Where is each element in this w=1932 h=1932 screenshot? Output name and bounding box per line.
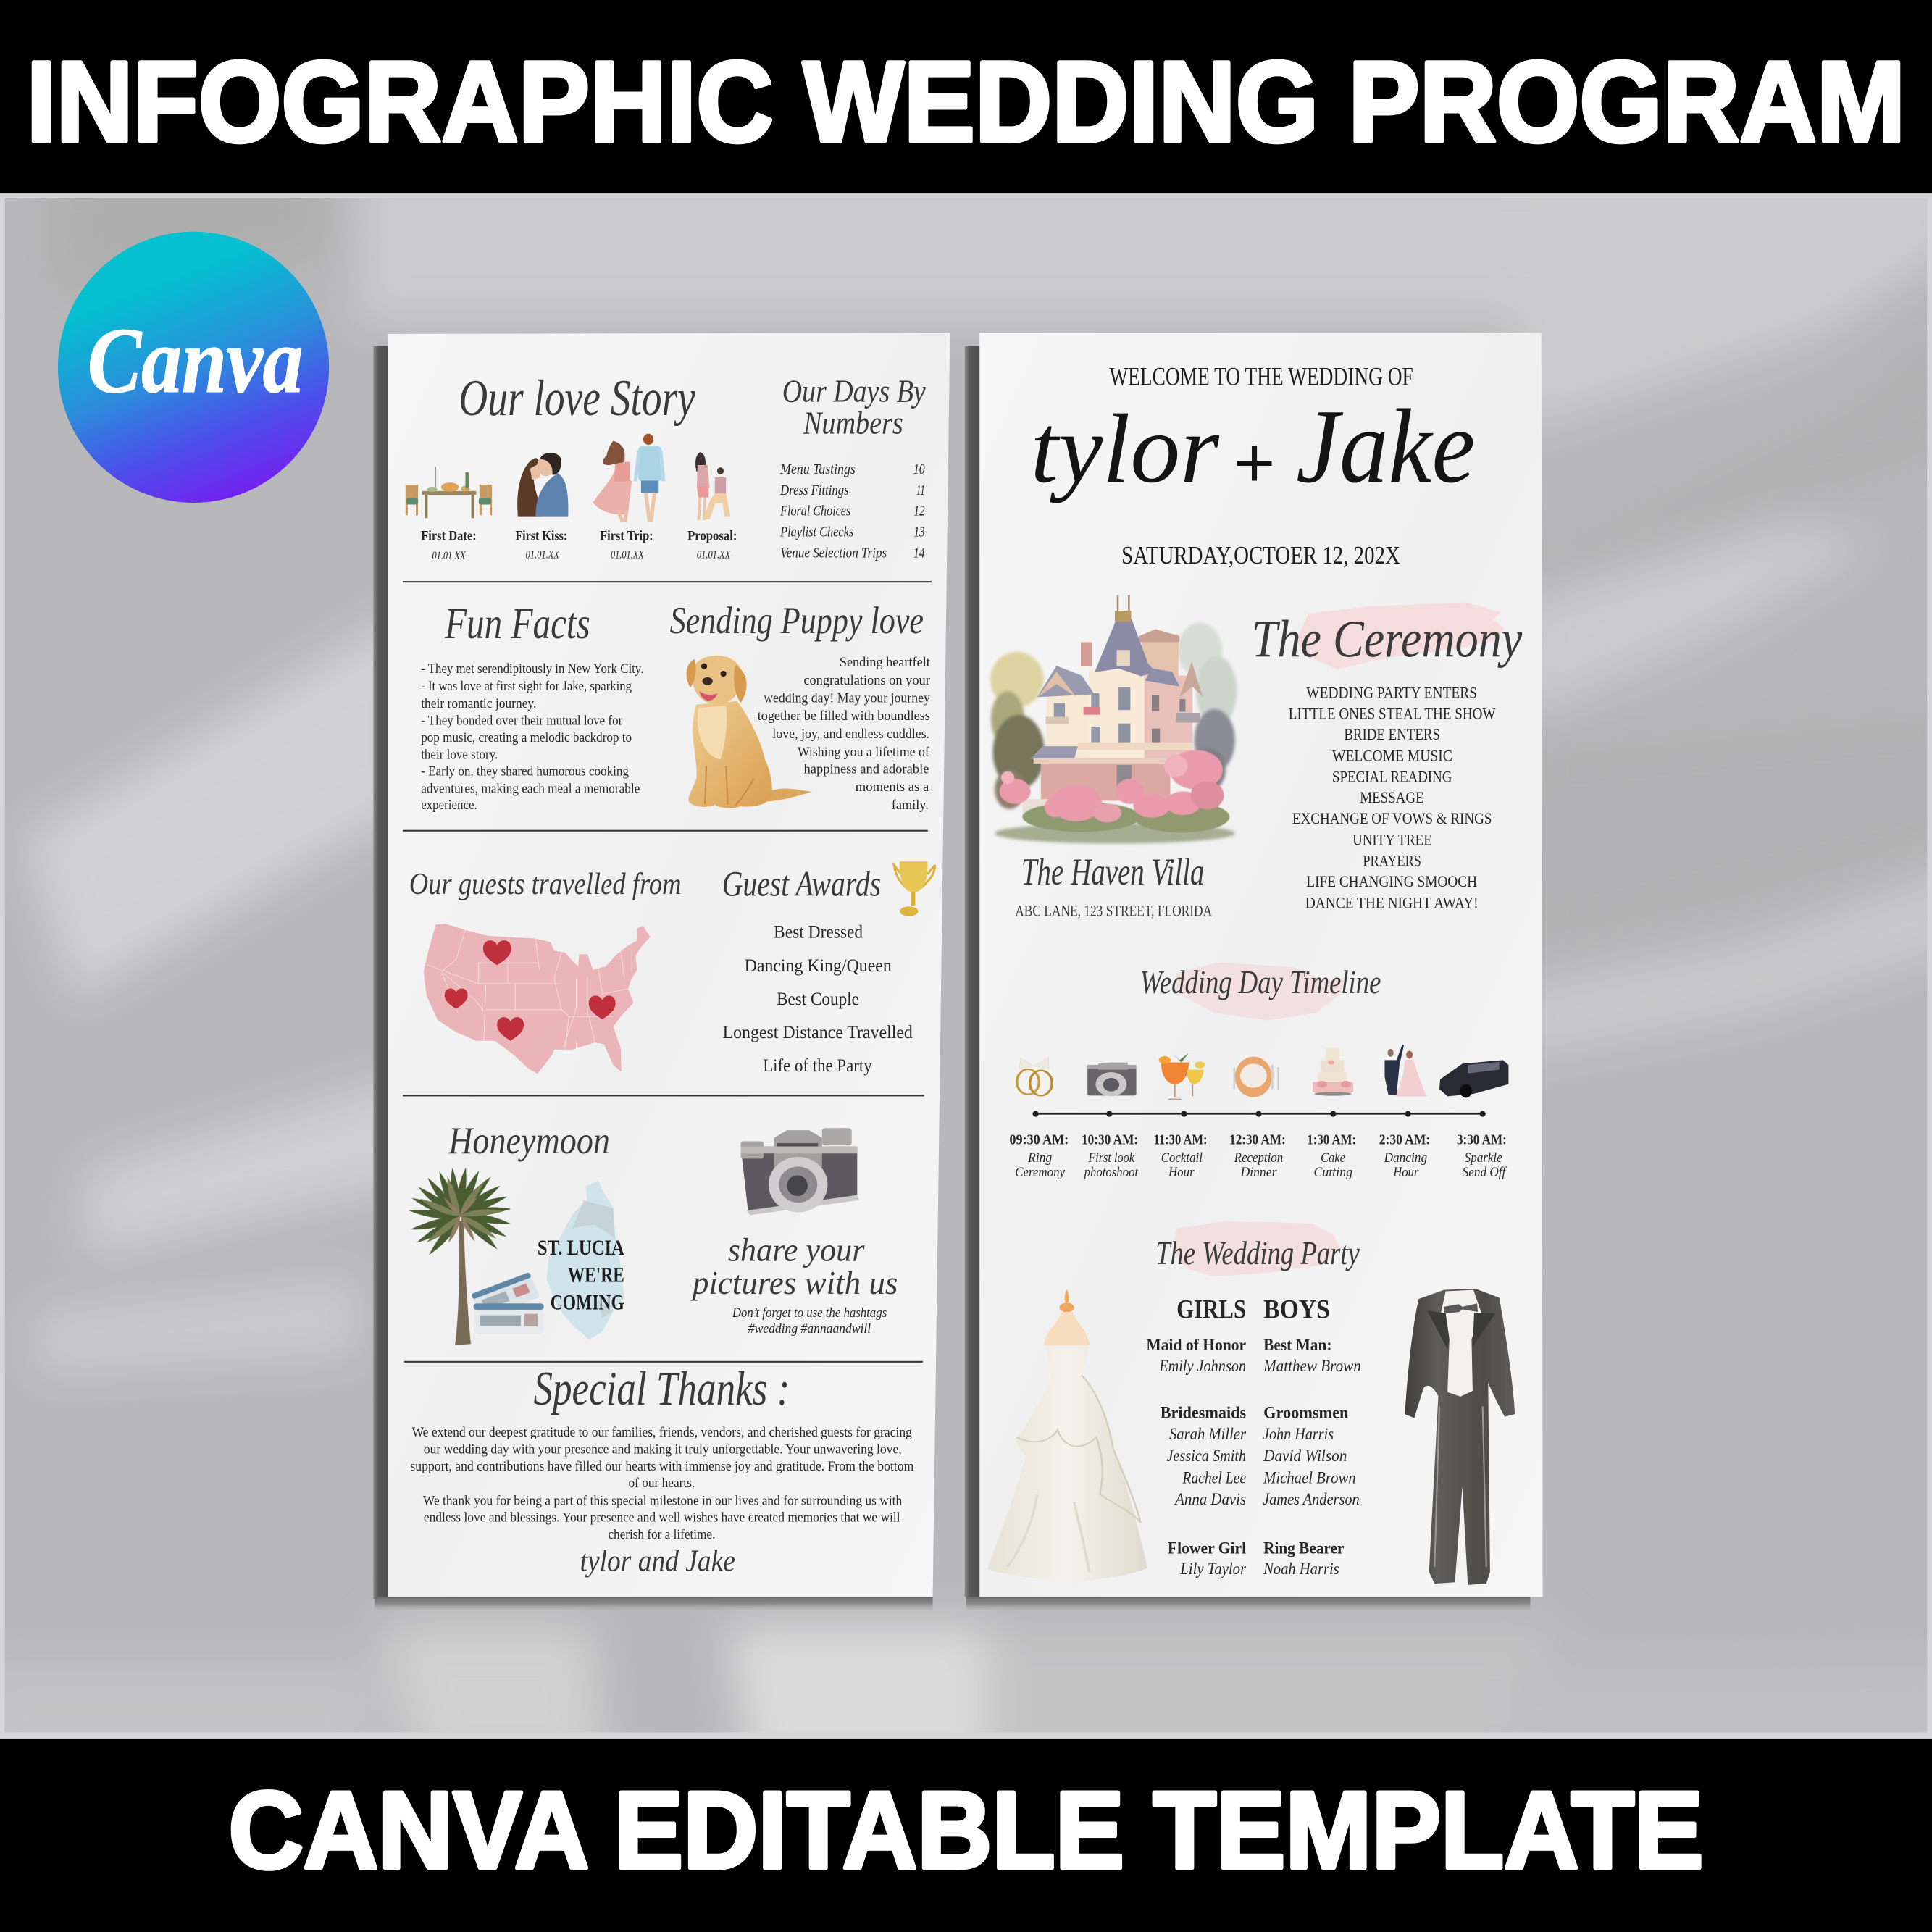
icon: place setting <box>1234 1057 1279 1097</box>
heading: the wedding party: The Wedding Party <box>1155 1234 1360 1271</box>
list: girls column: Lily Taylor <box>1179 1560 1246 1578</box>
timeline activity labels <box>1015 1150 1507 1180</box>
timeline activity labels: Cutting <box>1313 1165 1352 1180</box>
text block: fun facts list: their romantic journey. <box>421 696 536 711</box>
list: ceremony order: PRAYERS <box>1363 851 1421 869</box>
illustration: tuxedo <box>1405 1289 1515 1585</box>
list: day counts: 13 <box>913 524 925 540</box>
brush stroke <box>1173 1221 1341 1276</box>
list: boys column: James Anderson <box>1263 1490 1360 1508</box>
list: ceremony order: SPECIAL READING <box>1332 767 1452 785</box>
text block: puppy message <box>758 655 931 813</box>
text block: fun facts list: their love story. <box>421 747 498 762</box>
timeline times: 12:30 AM: <box>1229 1132 1286 1147</box>
list: boys column: Michael Brown <box>1263 1469 1356 1487</box>
list: ceremony order <box>1289 683 1496 911</box>
panel: left program page <box>388 333 950 1597</box>
list: award names <box>723 921 913 1076</box>
list: ceremony order: DANCE THE NIGHT AWAY! <box>1305 893 1479 911</box>
text block: fun facts list: - They met serendipitously in New York City. <box>421 661 643 677</box>
list: girls column: Sarah Miller <box>1169 1425 1246 1443</box>
heading: the haven villa: The Haven Villa <box>1021 851 1204 893</box>
list: ceremony order: LITTLE ONES STEAL THE SHOW <box>1289 705 1496 723</box>
icon: proposal <box>695 452 730 520</box>
timeline times: 11:30 AM: <box>1154 1132 1208 1147</box>
timeline activity labels: Cocktail <box>1161 1150 1203 1166</box>
heading: share your pictures with us: pictures with us <box>690 1264 898 1301</box>
timeline activity labels: Send Off <box>1463 1165 1507 1180</box>
text block: thanks message: our wedding day with your presence and making it truly unforgettable. Your unwavering love, <box>424 1442 902 1458</box>
icon: dinner table <box>406 467 492 518</box>
illustration: vintage camera <box>741 1128 859 1215</box>
text block: fun facts list: - Early on, they shared humorous cooking <box>421 764 629 779</box>
text block: thanks message: We thank you for being a part of this special milestone in our lives and for surrounding us with <box>423 1493 903 1508</box>
heading: guest awards: Guest Awards <box>722 864 881 904</box>
milestone labels: First Kiss: <box>515 529 567 544</box>
illustration: plane tickets <box>471 1272 544 1334</box>
list: ceremony order: EXCHANGE OF VOWS & RINGS <box>1292 809 1492 827</box>
list: award names: Dancing King/Queen <box>745 955 892 976</box>
list: girls column <box>1146 1295 1246 1578</box>
text block: puppy message: congratulations on your <box>803 673 931 688</box>
list: girls column: Flower Girl <box>1168 1539 1246 1557</box>
canva logo badge: Canva <box>88 309 303 412</box>
list: day counts: 11 <box>916 482 925 498</box>
timeline activity labels: First look <box>1087 1150 1134 1166</box>
timeline times: 09:30 AM: <box>1010 1132 1069 1147</box>
text: st lucia we're coming: WE'RE <box>568 1263 624 1287</box>
list: girls column: GIRLS <box>1176 1295 1246 1324</box>
list: ceremony order: MESSAGE <box>1360 788 1424 806</box>
signature: tylor and Jake <box>580 1544 735 1578</box>
text block: puppy message: Sending heartfelt <box>840 655 931 670</box>
list: ceremony order: BRIDE ENTERS <box>1344 725 1440 743</box>
title: couple names: Jake <box>1296 388 1475 505</box>
text block: puppy message: Wishing you a lifetime of <box>798 745 930 760</box>
icon: heart marker north <box>483 940 511 966</box>
text block: fun facts list <box>421 661 643 813</box>
section: venue <box>990 595 1237 919</box>
icon: kissing couple <box>517 453 568 517</box>
heading: honeymoon: Honeymoon <box>448 1120 610 1162</box>
timeline times: 2:30 AM: <box>1379 1132 1430 1147</box>
text block: thanks message: We extend our deepest gratitude to our families, friends, vendors, and cherished guests for gracing <box>412 1425 912 1440</box>
list: award names: Best Couple <box>777 988 859 1009</box>
icon: camera <box>1087 1063 1137 1096</box>
text block: thanks message <box>410 1425 914 1542</box>
list: boys column: David Wilson <box>1263 1447 1347 1465</box>
list: boys column <box>1263 1295 1361 1578</box>
icon: heart marker west <box>445 988 468 1009</box>
timeline times <box>1010 1132 1507 1147</box>
icons row <box>1017 1045 1508 1099</box>
section: wedding day timeline <box>1010 962 1508 1180</box>
list: ceremony order: WEDDING PARTY ENTERS <box>1306 683 1477 701</box>
text block: puppy message: happiness and adorable <box>803 761 929 777</box>
icon: wedding cake <box>1313 1048 1353 1096</box>
bottom banner <box>0 1739 1932 1932</box>
list: day counts <box>779 461 925 561</box>
text block: thanks message: support, and contributions have filled our hearts with immense joy and gratitude. From the bottom <box>410 1459 914 1474</box>
text: hashtags: #wedding #annaandwill <box>748 1321 871 1337</box>
text block: fun facts list: - It was love at first sight for Jake, sparking <box>421 679 632 694</box>
list: girls column: Emily Johnson <box>1158 1357 1246 1375</box>
timeline axis <box>1033 1111 1486 1117</box>
list: girls column: Anna Davis <box>1174 1490 1246 1508</box>
list: award names: Best Dressed <box>774 921 863 942</box>
text block: thanks message: cherish for a lifetime. <box>608 1527 715 1542</box>
section: share your pictures <box>690 1128 898 1337</box>
title: couple names: tylor <box>1031 395 1220 503</box>
milestone labels: 01.01.XX <box>432 550 466 562</box>
list: ceremony order: WELCOME MUSIC <box>1332 747 1452 765</box>
section: the wedding party <box>987 1221 1515 1585</box>
section: guests travelled from <box>409 867 682 1074</box>
list: boys column: Matthew Brown <box>1263 1357 1361 1375</box>
milestone labels: First Trip: <box>600 529 653 544</box>
timeline activity labels: Hour <box>1168 1165 1195 1180</box>
list: ceremony order: LIFE CHANGING SMOOCH <box>1306 872 1477 890</box>
list: girls column: Maid of Honor <box>1146 1336 1246 1354</box>
heading: special thanks: Special Thanks : <box>533 1363 790 1415</box>
timeline activity labels: Hour <box>1392 1165 1419 1180</box>
list: girls column: Jessica Smith <box>1166 1447 1246 1465</box>
text block: puppy message: family. <box>892 798 929 813</box>
paper shadows <box>373 346 1531 1610</box>
list: boys column: Groomsmen <box>1263 1404 1349 1422</box>
list: girls column: Rachel Lee <box>1182 1469 1246 1487</box>
milestone labels: First Date: <box>421 529 477 544</box>
text: hashtags <box>732 1305 887 1337</box>
illustration: wedding dress on mannequin <box>987 1289 1147 1584</box>
heading: our days by numbers: Our Days By <box>782 373 926 409</box>
illustration: victorian villa <box>990 595 1237 844</box>
section: guest awards <box>722 861 935 1076</box>
brush stroke <box>1176 962 1349 1020</box>
timeline times: 3:30 AM: <box>1457 1132 1507 1147</box>
canva logo badge <box>58 232 329 503</box>
map: united states with hearts <box>424 924 651 1074</box>
flowering bushes <box>1000 750 1229 832</box>
milestone labels: 01.01.XX <box>526 549 560 561</box>
icon: cocktails <box>1159 1053 1205 1099</box>
list: day counts: Playlist Checks <box>779 524 853 540</box>
icon: dancing couple <box>1384 1045 1426 1096</box>
text block: puppy message: love, joy, and endless cuddles. <box>772 727 929 742</box>
heading: our guests travelled from: Our guests travelled from <box>409 867 682 901</box>
list: boys column: Noah Harris <box>1263 1560 1339 1578</box>
text block: thanks message: of our hearts. <box>628 1476 695 1491</box>
text block: puppy message: moments as a <box>856 779 929 795</box>
icon: limousine <box>1439 1060 1508 1097</box>
text block: fun facts list: experience. <box>421 798 477 813</box>
timeline activity labels: Cake <box>1321 1150 1345 1166</box>
milestone labels: Proposal: <box>687 529 737 544</box>
section: welcome header <box>1031 361 1475 569</box>
text block: fun facts list: adventures, making each meal a memorable <box>421 781 640 796</box>
timeline activity labels: Dancing <box>1384 1150 1427 1166</box>
icon: gold trophy <box>894 861 935 916</box>
title: couple names: + <box>1234 422 1275 502</box>
milestone labels: 01.01.XX <box>697 549 731 561</box>
list: day counts: Menu Tastings <box>779 461 856 477</box>
timeline activity labels: Ceremony <box>1015 1165 1065 1180</box>
section: our days by numbers <box>779 373 926 561</box>
milestone labels: 01.01.XX <box>611 549 645 561</box>
title: couple names <box>1031 388 1475 505</box>
text block: thanks message: endless love and blessings. Your presence and well wishes have created memories that we will <box>424 1510 900 1526</box>
list: day counts: 10 <box>913 461 925 477</box>
text: venue address: ABC LANE, 123 STREET, FLORIDA <box>1015 901 1212 919</box>
text: st lucia we're coming <box>538 1236 624 1315</box>
icon: couple walking hand in hand <box>593 434 664 522</box>
text: hashtags: Don’t forget to use the hashtags <box>732 1305 887 1321</box>
text block: puppy message: together be filled with boundless <box>758 708 930 724</box>
heading: share your pictures with us <box>690 1231 898 1301</box>
icon: heart marker east <box>589 995 616 1019</box>
timeline activity labels: Ring <box>1027 1150 1053 1166</box>
section: honeymoon <box>408 1120 624 1345</box>
text block: puppy message: wedding day! May your journey <box>764 690 930 706</box>
list: award names: Longest Distance Travelled <box>723 1021 913 1042</box>
timeline activity labels: Dinner <box>1240 1165 1277 1180</box>
text block: fun facts list: pop music, creating a melodic backdrop to <box>421 730 632 745</box>
list: day counts: Dress Fittings <box>779 482 849 498</box>
list: ceremony order: UNITY TREE <box>1352 831 1432 849</box>
heading: fun facts: Fun Facts <box>444 599 590 648</box>
list: boys column: Best Man: <box>1263 1336 1331 1354</box>
text: st lucia we're coming: ST. LUCIA <box>538 1236 624 1260</box>
heading: wedding day timeline: Wedding Day Timeline <box>1140 963 1381 1000</box>
icon: heart marker south <box>497 1017 524 1041</box>
illustration: palm tree <box>408 1167 511 1345</box>
text block: fun facts list: - They bonded over their mutual love for <box>421 714 623 729</box>
timeline activity labels: Sparkle <box>1465 1150 1502 1166</box>
list: award names: Life of the Party <box>763 1055 872 1076</box>
bottom banner: CANVA EDITABLE TEMPLATE <box>229 1770 1703 1892</box>
list: day counts: Floral Choices <box>779 503 850 519</box>
heading: our days by numbers: Numbers <box>803 406 903 441</box>
heading: sending puppy love: Sending Puppy love <box>670 600 924 642</box>
heading: our days by numbers <box>782 373 926 441</box>
section: fun facts <box>421 599 643 813</box>
timeline activity labels: Reception <box>1234 1150 1283 1166</box>
illustration: golden retriever puppy <box>687 656 812 808</box>
section: the ceremony <box>1252 603 1523 911</box>
section: our love story <box>406 369 737 562</box>
top banner <box>0 0 1932 193</box>
list: day counts: 14 <box>913 545 925 561</box>
list: boys column: BOYS <box>1263 1295 1330 1324</box>
timeline times: 1:30 AM: <box>1307 1132 1356 1147</box>
milestone labels <box>421 529 737 562</box>
timeline activity labels: photoshoot <box>1083 1165 1139 1180</box>
icon: wedding rings <box>1017 1057 1052 1095</box>
text: st lucia we're coming: COMING <box>551 1291 624 1315</box>
heading: the ceremony: The Ceremony <box>1252 610 1523 669</box>
list: day counts: 12 <box>913 503 925 519</box>
list: boys column: John Harris <box>1263 1425 1334 1443</box>
list: day counts: Venue Selection Trips <box>780 545 887 561</box>
heading: share your pictures with us: share your <box>728 1231 865 1268</box>
section: sending puppy love <box>670 600 931 813</box>
illustration: st lucia island map <box>547 1181 624 1339</box>
panel: right program page <box>979 333 1543 1597</box>
text: date: SATURDAY,OCTOER 12, 202X <box>1121 541 1400 569</box>
timeline times: 10:30 AM: <box>1082 1132 1138 1147</box>
list: girls column: Bridesmaids <box>1161 1404 1246 1422</box>
brush stroke <box>1296 603 1505 669</box>
section: special thanks <box>410 1363 914 1578</box>
text: welcome line: WELCOME TO THE WEDDING OF <box>1109 361 1413 390</box>
heading: our love story: Our love Story <box>459 369 695 427</box>
illustrations: four couple milestones <box>406 434 730 522</box>
list: boys column: Ring Bearer <box>1263 1539 1344 1557</box>
